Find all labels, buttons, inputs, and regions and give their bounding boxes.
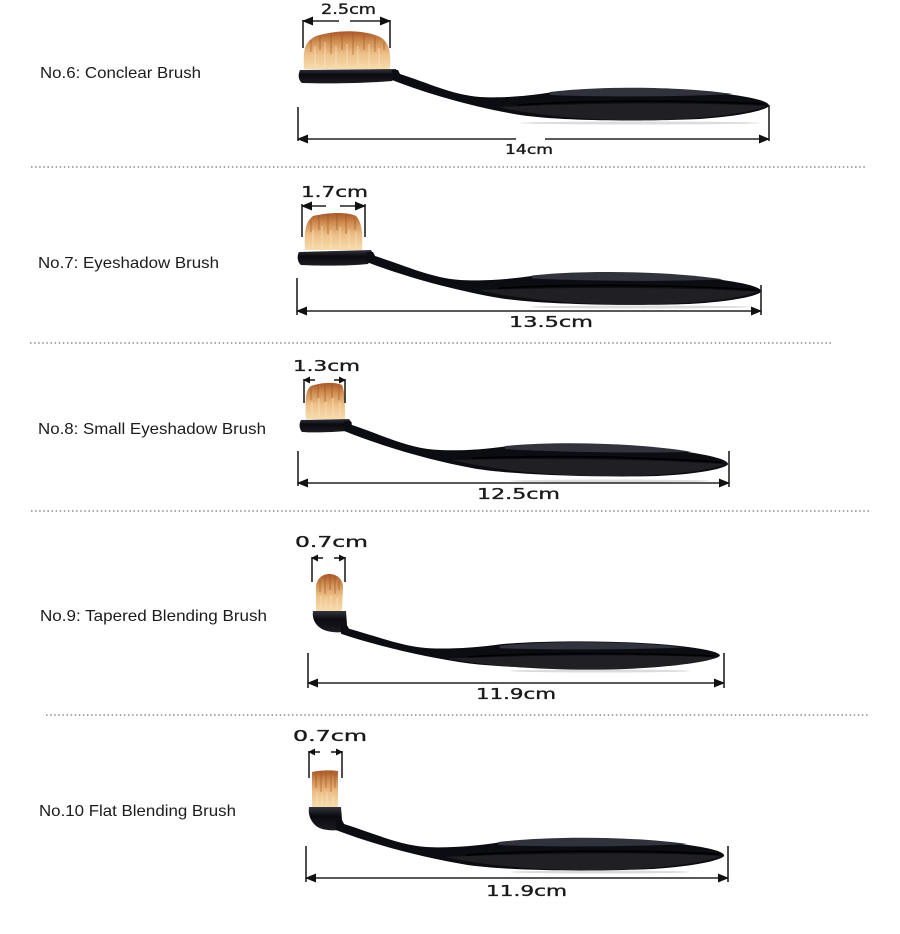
- icon: No.9 brush: [313, 574, 720, 672]
- icon: No.7 brush: [298, 213, 761, 308]
- label: No.9: No.9: Tapered Blending Brush: [40, 608, 267, 625]
- panel: No.6 conclear brush: [40, 2, 769, 158]
- width dimension 0.7cm: [293, 727, 367, 778]
- panel: No.10 flat blending brush: [39, 727, 728, 900]
- width dimension 1.3cm: 1.3cm: [293, 357, 360, 375]
- length dimension 13.5cm: [297, 278, 761, 331]
- width dimension 1.7cm: 1.7cm: [301, 183, 368, 201]
- label: No.8: No.8: Small Eyeshadow Brush: [38, 421, 266, 438]
- label: No.7: No.7: Eyeshadow Brush: [38, 255, 219, 272]
- length dimension 12.5cm: 12.5cm: [477, 485, 560, 503]
- icon: No.6 brush: [299, 31, 769, 124]
- length dimension 11.9cm: 11.9cm: [476, 685, 556, 703]
- label: No.6: No.6: Conclear Brush: [40, 65, 201, 82]
- width dimension 1.3cm: [293, 357, 360, 403]
- label: No.10: No.10 Flat Blending Brush: [39, 803, 236, 820]
- width dimension 1.7cm: [301, 183, 368, 237]
- length dimension 14cm: 14cm: [505, 143, 553, 158]
- length dimension 14cm: [298, 105, 769, 158]
- width dimension 0.7cm: [295, 533, 368, 582]
- length dimension 12.5cm: [298, 451, 729, 503]
- length dimension 11.9cm: [306, 846, 728, 900]
- width dimension 0.7cm: 0.7cm: [293, 727, 367, 745]
- length dimension 13.5cm: 13.5cm: [509, 313, 593, 331]
- width dimension 2.5cm: [303, 2, 390, 48]
- length dimension 11.9cm: [308, 653, 724, 703]
- icon: No.8 brush: [300, 383, 728, 482]
- width dimension 2.5cm: 2.5cm: [321, 2, 376, 18]
- icon: No.10 brush: [309, 770, 724, 874]
- panel: No.8 small eyeshadow brush: [38, 357, 729, 503]
- panel: No.9 tapered blending brush: [40, 533, 724, 703]
- width dimension 0.7cm: 0.7cm: [295, 533, 368, 551]
- length dimension 11.9cm: 11.9cm: [486, 882, 567, 900]
- panel: No.7 eyeshadow brush: [38, 183, 761, 331]
